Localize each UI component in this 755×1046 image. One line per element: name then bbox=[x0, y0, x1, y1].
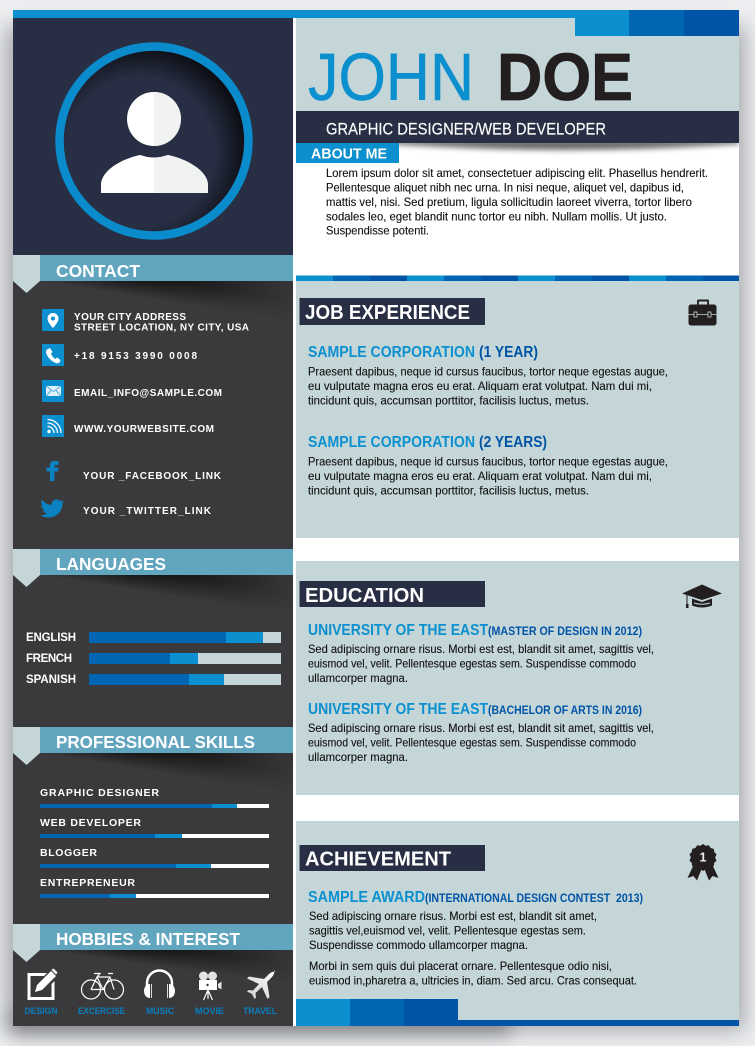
education entry 2 bbox=[308, 701, 654, 764]
title: name: JOHN bbox=[308, 40, 474, 115]
about me text: mattis vel, nisi. Sed pretium, ligula sollicitudin laoreet viverra, tortor libero bbox=[326, 195, 692, 209]
about me heading: ABOUT ME bbox=[311, 146, 387, 162]
contact: phone bbox=[42, 344, 197, 366]
hobby: movie bbox=[195, 972, 224, 1016]
subtitle band bbox=[296, 111, 739, 143]
skill bar: web developer: WEB DEVELOPER bbox=[40, 817, 141, 829]
education entry 1: ullamcorper magna. bbox=[308, 671, 408, 685]
bottom colour blocks bbox=[296, 999, 739, 1026]
section: hobbies and interest bbox=[13, 924, 293, 1016]
icon: person avatar bbox=[101, 92, 208, 193]
about me text: Suspendisse potenti. bbox=[326, 224, 429, 238]
education entry 1: UNIVERSITY OF THE EAST bbox=[308, 622, 488, 639]
education entry 1: euismod vel, velit. Pellentesque egestas sem. Suspendisse commodo bbox=[308, 656, 636, 670]
ribbon: contact: CONTACT bbox=[56, 261, 140, 281]
achievement entry: Suspendisse commodo ullamcorper magna. bbox=[309, 938, 528, 952]
education entry 2: Sed adipiscing ornare risus. Morbi est est, blandit sit amet, sagittis vel, bbox=[308, 721, 654, 735]
section: professional skills bbox=[13, 727, 293, 898]
panel: achievement bbox=[296, 821, 739, 1026]
section: languages bbox=[13, 549, 293, 686]
striped divider bbox=[296, 276, 739, 281]
education entry 1 bbox=[308, 622, 654, 685]
photo ring bbox=[60, 46, 248, 236]
job entry 1 bbox=[308, 344, 668, 408]
job entry 2: tincidunt quis, accumsan porttitor, facilisis luctus, metus. bbox=[308, 484, 589, 498]
education entry 2: ullamcorper magna. bbox=[308, 750, 408, 764]
job entry 1: (1 YEAR) bbox=[479, 344, 538, 361]
language bar: english bbox=[26, 632, 281, 644]
hobby: design: DESIGN bbox=[24, 1006, 58, 1016]
contact: email: EMAIL_INFO@SAMPLE.COM bbox=[74, 388, 222, 399]
ribbon: professional skills bbox=[13, 727, 293, 794]
achievement entry: euismod in,pharetra a, ultricies in, diam. Sed arcu. Cras consequat. bbox=[309, 974, 637, 988]
language bar: spanish bbox=[26, 674, 281, 686]
contact: twitter bbox=[40, 500, 212, 518]
panel: about me bbox=[296, 111, 739, 276]
about me text: Pellentesque aliquet nibh nec urna. In nisi neque, aliquet vel, dapibus id, bbox=[326, 180, 684, 194]
language bar: english: ENGLISH bbox=[26, 632, 76, 644]
about me text: Lorem ipsum dolor sit amet, consectetuer adipiscing elit. Phasellus hendrerit. bbox=[326, 166, 708, 180]
heading: job experience: JOB EXPERIENCE bbox=[305, 301, 470, 324]
achievement entry: (INTERNATIONAL DESIGN CONTEST 2013) bbox=[425, 891, 643, 905]
hobby: exercise bbox=[78, 974, 125, 1016]
icon: briefcase bbox=[688, 300, 716, 326]
heading: education bbox=[300, 581, 485, 607]
contact: facebook: YOUR _FACEBOOK_LINK bbox=[83, 471, 222, 482]
ribbon: professional skills: PROFESSIONAL SKILLS bbox=[56, 732, 255, 752]
contact: twitter: YOUR _TWITTER_LINK bbox=[83, 506, 212, 517]
white gap between job and education bbox=[296, 538, 739, 561]
about me text bbox=[326, 166, 708, 238]
heading: achievement: ACHIEVEMENT bbox=[305, 848, 451, 870]
language bar: french: FRENCH bbox=[26, 653, 72, 665]
skill bar: blogger bbox=[40, 847, 269, 868]
hobby: design bbox=[24, 968, 58, 1016]
panel: sidebar dark background bbox=[13, 256, 293, 1026]
skill bar: graphic designer: GRAPHIC DESIGNER bbox=[40, 787, 159, 799]
achievement entry: Morbi in sem quis dui placerat ornare. Pellentesque odio nisi, bbox=[309, 959, 612, 973]
education entry 1: Sed adipiscing ornare risus. Morbi est est, blandit sit amet, sagittis vel, bbox=[308, 642, 654, 656]
achievement entry: Sed adipiscing ornare risus. Morbi est est, blandit sit amet, bbox=[309, 909, 597, 923]
ribbon: languages: LANGUAGES bbox=[56, 554, 166, 574]
skill bar: entrepreneur: ENTREPRENEUR bbox=[40, 877, 135, 889]
job entry 2 bbox=[308, 434, 668, 498]
corner colour blocks bbox=[575, 10, 739, 36]
contact: email bbox=[42, 380, 222, 402]
icon: graduation cap bbox=[682, 584, 722, 608]
divider column bbox=[293, 18, 296, 1026]
ribbon: hobbies bbox=[13, 924, 293, 985]
icon: award ribbon bbox=[688, 844, 718, 880]
job entry 1: Praesent dapibus, neque id cursus faucibus, tortor neque egestas augue, bbox=[308, 364, 668, 378]
title: name: DOE bbox=[497, 40, 633, 115]
ribbon: contact bbox=[13, 255, 293, 322]
contact: address: YOUR CITY ADDRESS bbox=[74, 312, 186, 323]
panel: profile bbox=[13, 18, 293, 256]
contact: website bbox=[42, 415, 214, 437]
achievement entry bbox=[308, 889, 643, 988]
language bar: spanish: SPANISH bbox=[26, 674, 76, 686]
achievement entry: SAMPLE AWARD bbox=[308, 889, 425, 906]
hobby: travel: TRAVEL bbox=[243, 1006, 277, 1016]
about me text: sodales leo, eget blandit nunc tortor eu nibh. Nullam mollis. Ut justo. bbox=[326, 210, 667, 224]
section: contact bbox=[13, 255, 293, 518]
contact: phone: +18 9153 3990 0008 bbox=[74, 351, 197, 362]
education entry 2: euismod vel, velit. Pellentesque egestas sem. Suspendisse commodo bbox=[308, 736, 636, 750]
hobby: music: MUSIC bbox=[146, 1006, 174, 1016]
about me heading bbox=[296, 143, 399, 163]
skill bar: entrepreneur bbox=[40, 877, 269, 898]
job entry 2: eu vulputate magna eros eu erat. Aliquam erat volutpat. Nam dui mi, bbox=[308, 469, 652, 483]
job entry 2: (2 YEARS) bbox=[479, 434, 547, 451]
icon: award ribbon: 1 bbox=[700, 850, 707, 864]
education entry 1: (MASTER OF DESIGN IN 2012) bbox=[488, 624, 642, 638]
skill bar: graphic designer bbox=[40, 787, 269, 808]
skill bar: blogger: BLOGGER bbox=[40, 847, 97, 859]
job entry 1: SAMPLE CORPORATION bbox=[308, 344, 475, 361]
ribbon: languages bbox=[13, 549, 293, 616]
panel: education bbox=[296, 561, 739, 795]
hobby: exercise: EXCERCISE bbox=[78, 1006, 125, 1016]
title: name bbox=[308, 40, 633, 115]
contact: facebook bbox=[46, 461, 222, 482]
skill bar: web developer bbox=[40, 817, 269, 838]
contact: website: WWW.YOURWEBSITE.COM bbox=[74, 424, 214, 435]
hobby: travel bbox=[243, 970, 277, 1016]
language bar: french bbox=[26, 653, 281, 665]
hobby: movie: MOVIE bbox=[195, 1006, 224, 1016]
contact: address bbox=[42, 309, 249, 334]
job entry 2: SAMPLE CORPORATION bbox=[308, 434, 475, 451]
panel: name header bbox=[296, 10, 739, 115]
contact: address: STREET LOCATION, NY CITY, USA bbox=[74, 322, 249, 334]
job entry 1: eu vulputate magna eros eu erat. Aliquam erat volutpat. Nam dui mi, bbox=[308, 379, 652, 393]
white gap between education and achievement bbox=[296, 795, 739, 821]
panel: job experience bbox=[296, 281, 739, 538]
education entry 2: UNIVERSITY OF THE EAST bbox=[308, 701, 488, 718]
ribbon: hobbies: HOBBIES & INTEREST bbox=[56, 929, 240, 949]
band shadow bbox=[390, 140, 739, 150]
job entry 2: Praesent dapibus, neque id cursus faucibus, tortor neque egestas augue, bbox=[308, 454, 668, 468]
achievement entry: sagittis vel,euismod vel, velit. Pellentesque egestas sem. bbox=[309, 924, 586, 938]
hobby: music bbox=[144, 970, 175, 1016]
top accent bar bbox=[13, 10, 739, 18]
education entry 2: (BACHELOR OF ARTS IN 2016) bbox=[488, 703, 642, 717]
heading: education: EDUCATION bbox=[305, 584, 424, 607]
job entry 1: tincidunt quis, accumsan porttitor, facilisis luctus, metus. bbox=[308, 394, 589, 408]
subtitle band: GRAPHIC DESIGNER/WEB DEVELOPER bbox=[326, 120, 606, 138]
